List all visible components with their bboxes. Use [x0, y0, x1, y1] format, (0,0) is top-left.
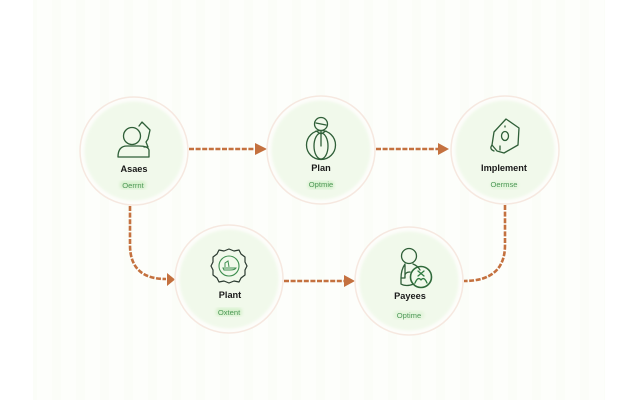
label: Asaes: Asaes: [120, 164, 148, 174]
node: Payees: [355, 227, 463, 335]
tag: Oermse: Oermse: [490, 180, 518, 189]
arrow: Plan to Implement: [376, 143, 449, 155]
node: Implement: [451, 96, 559, 204]
tag: Oxtent: Oxtent: [218, 308, 241, 317]
tag: Optime: Optime: [397, 311, 421, 320]
arrow: Assess down to Plant: [130, 206, 175, 286]
arrow: Implement down to Payees: [464, 205, 505, 281]
node: Assess: [80, 97, 188, 205]
tag: Optmie: Optmie: [309, 180, 333, 189]
label: Plan: Plan: [311, 163, 331, 173]
icon: person with badge: [401, 248, 432, 288]
icon: gear: [211, 249, 247, 283]
node: Plant: [175, 225, 283, 333]
node: Plan: [267, 96, 375, 204]
label: Plant: Plant: [219, 290, 241, 300]
arrow: Plant to Payees: [284, 275, 355, 287]
tag: Oerrnt: Oerrnt: [122, 181, 145, 190]
label: Implement: Implement: [481, 163, 527, 173]
icon: person with shield: [118, 122, 150, 157]
icon: figure in oval: [306, 118, 336, 160]
arrow: Assess to Plan: [189, 143, 267, 155]
label: Payees: Payees: [394, 291, 426, 301]
icon: hexagon with drop: [491, 119, 519, 153]
